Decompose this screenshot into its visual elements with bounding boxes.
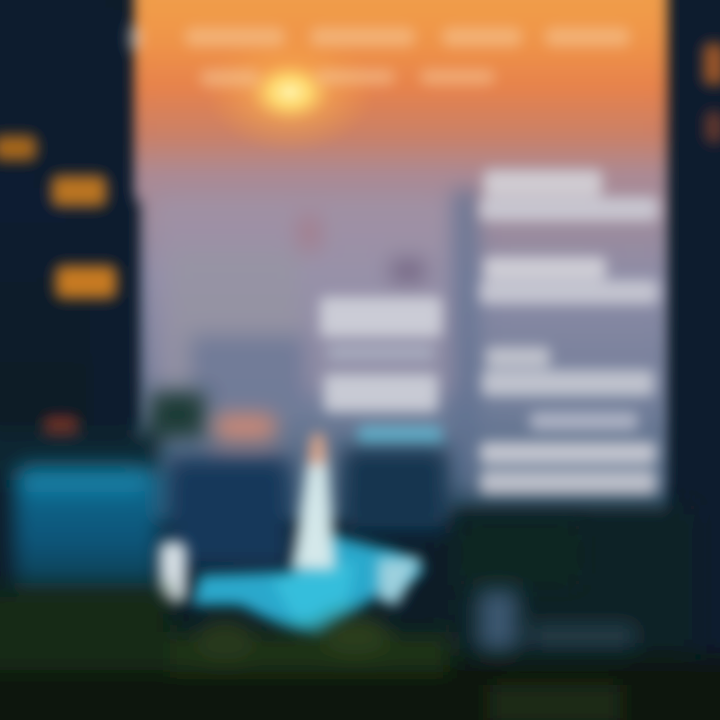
blue pool building <box>14 414 448 593</box>
left dark tower <box>0 0 140 450</box>
hazy distant city <box>155 190 478 480</box>
right white building blocks <box>480 170 658 496</box>
foreground foliage <box>0 525 720 720</box>
centre white building blocks <box>320 297 442 446</box>
right dark tower <box>676 0 720 720</box>
left tower lit windows <box>0 136 116 444</box>
water edge highlights <box>160 542 422 606</box>
distant pale column <box>478 590 635 650</box>
blurred title text band <box>90 26 630 86</box>
lower dark base <box>0 392 695 720</box>
turquoise water <box>192 535 425 640</box>
fountain jet <box>292 434 336 570</box>
right tower lit windows <box>704 44 720 142</box>
sun glow <box>205 30 375 154</box>
sky gradient <box>132 0 668 520</box>
